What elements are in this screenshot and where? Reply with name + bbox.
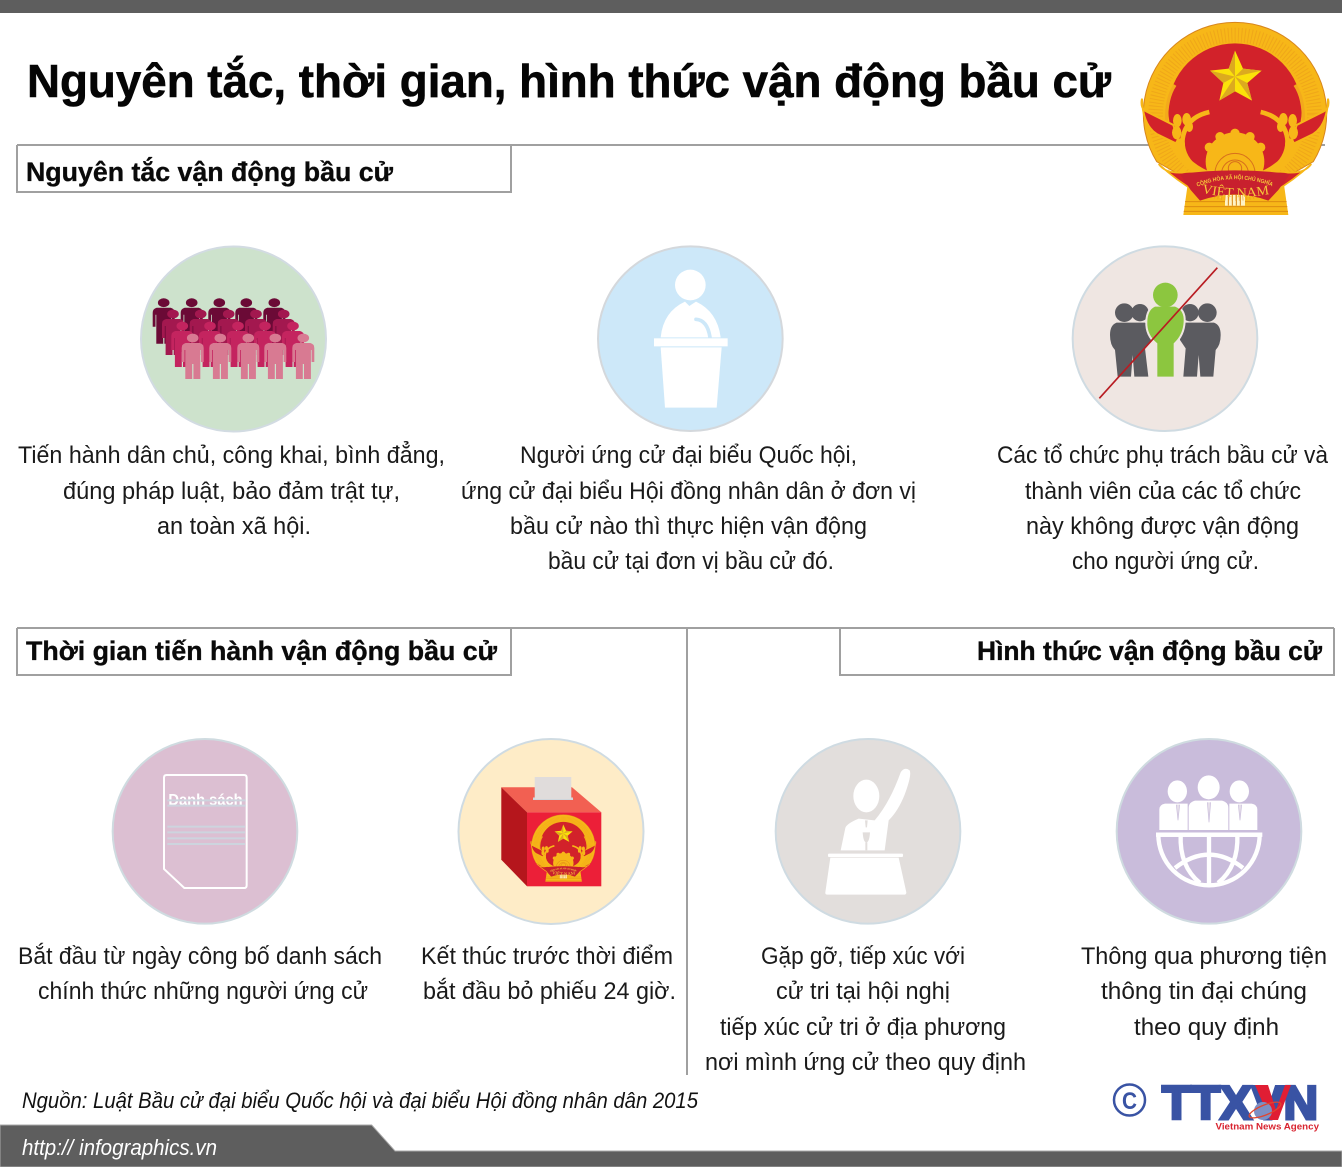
top bar (0, 0, 1342, 13)
icon: crossed out candidate group (1073, 246, 1257, 431)
logo: TTXVN: C (1122, 1088, 1137, 1115)
text: form media (1081, 943, 1327, 1041)
text: form meeting: Gặp gỡ, tiếp xúc với (761, 943, 965, 970)
text: principle 3: này không được vận động (1026, 513, 1299, 540)
text: principle 3: cho người ứng cử. (1072, 548, 1259, 575)
text: time end (421, 943, 676, 1005)
logo: TTXVN: TTXVN (1162, 1076, 1318, 1129)
panel: time start (18, 739, 382, 1005)
logo: TTXVN: Vietnam News Agency (1216, 1122, 1320, 1132)
heading: Hình thức vận động bầu cử (840, 628, 1334, 675)
panel: time end (421, 739, 676, 1005)
icon: speaker raising hand (776, 739, 960, 924)
heading: Thời gian tiến hành vận động bầu cử: Thời gian tiến hành vận động bầu cử (26, 636, 497, 666)
icon: ballot box (458, 739, 644, 924)
text: principle 1 (18, 440, 445, 540)
text: principle 1: Tiến hành dân chủ, công khai, bình đẳng, (18, 440, 445, 469)
icon: candidate list document: Danh sách (168, 792, 243, 809)
text: principle 2 (461, 442, 916, 575)
panel: form media (1081, 739, 1327, 1041)
icon: speaker at podium (598, 246, 783, 431)
source note: Nguồn: Luật Bầu cử đại biểu Quốc hội và đại biểu Hội đồng nhân dân 2015 (22, 1088, 698, 1113)
text: principle 2: ứng cử đại biểu Hội đồng nhân dân ở đơn vị (461, 478, 916, 505)
text: form meeting: cử tri tại hội nghị (776, 978, 950, 1005)
text: principle 1: đúng pháp luật, bảo đảm trật tự, (63, 478, 400, 505)
text: principle 2: bầu cử tại đơn vị bầu cử đó. (548, 548, 834, 575)
text: principle 2: Người ứng cử đại biểu Quốc hội, (520, 442, 857, 469)
text: time start (18, 943, 382, 1005)
text: principle 1: an toàn xã hội. (157, 513, 311, 540)
footer bar (0, 1125, 1342, 1167)
text: principle 3 (997, 442, 1328, 575)
text: principle 3: thành viên của các tổ chức (1025, 478, 1301, 505)
text: form meeting: nơi mình ứng cử theo quy định (705, 1049, 1026, 1076)
heading: Nguyên tắc vận động bầu cử: Nguyên tắc vận động bầu cử (26, 156, 393, 187)
title: Nguyên tắc, thời gian, hình thức vận động bầu cử (27, 55, 1112, 107)
panel: form meeting (705, 739, 1026, 1076)
text: principle 2: bầu cử nào thì thực hiện vận động (510, 513, 867, 540)
text: form media: theo quy định (1134, 1014, 1279, 1041)
icon: crowd of people (141, 246, 326, 432)
heading: Hình thức vận động bầu cử: Hình thức vận động bầu cử (977, 636, 1322, 666)
icon: candidate list document (113, 739, 297, 924)
text: time start: chính thức những người ứng cử (38, 978, 368, 1005)
footer bar: http:// infographics.vn (22, 1135, 217, 1160)
panel: principle 3 (997, 246, 1328, 575)
text: time end: bắt đầu bỏ phiếu 24 giờ. (423, 978, 676, 1005)
heading: Nguyên tắc vận động bầu cử (17, 145, 1325, 192)
text: form media: thông tin đại chúng (1101, 978, 1307, 1005)
panel: principle 2 (461, 246, 916, 575)
text: time start: Bắt đầu từ ngày công bố danh sách (18, 943, 382, 970)
heading: Thời gian tiến hành vận động bầu cử (17, 628, 1334, 675)
text: time end: Kết thúc trước thời điểm (421, 943, 673, 970)
panel: principle 1 (18, 246, 445, 540)
text: form meeting (705, 943, 1026, 1076)
text: form media: Thông qua phương tiện (1081, 943, 1327, 970)
national emblem (1142, 22, 1328, 215)
text: form meeting: tiếp xúc cử tri ở địa phương (720, 1014, 1006, 1041)
icon: people over globe (1117, 739, 1301, 924)
